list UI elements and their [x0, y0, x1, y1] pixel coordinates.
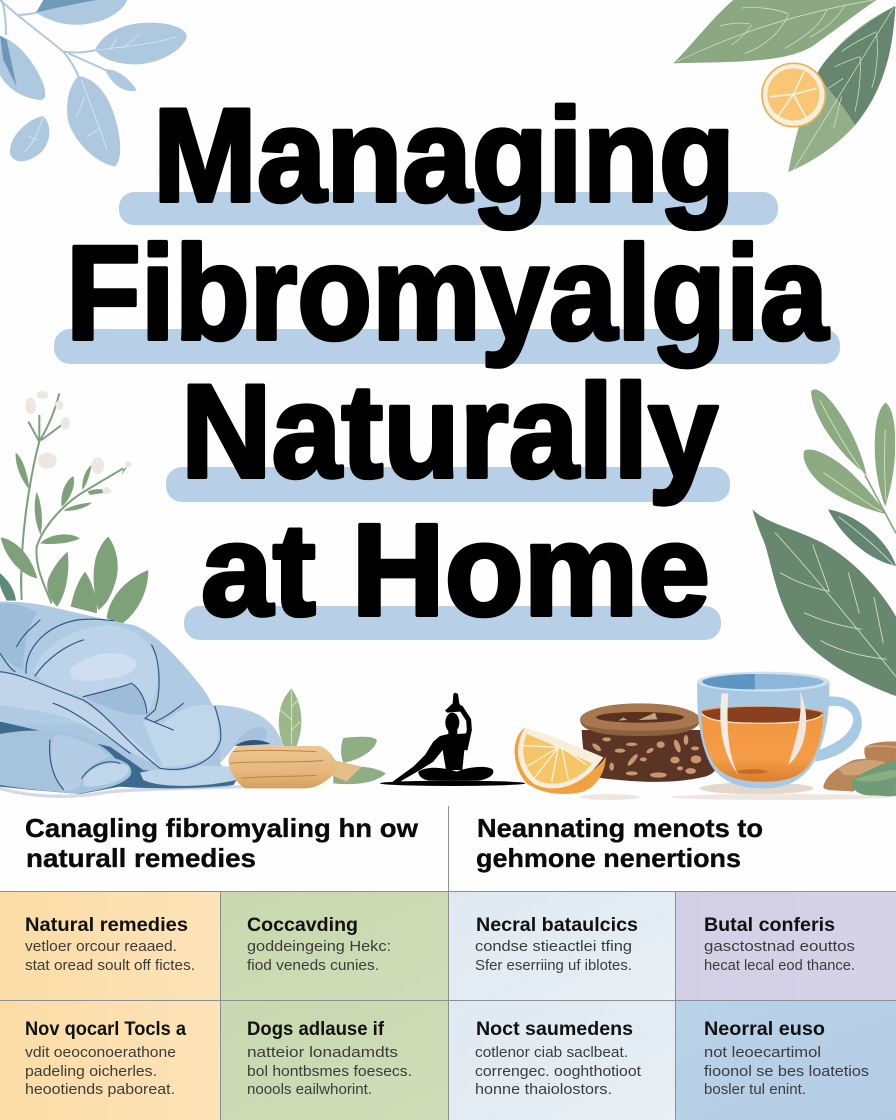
title: at Home [201, 496, 710, 643]
card: butal conferis: Butal conferis [704, 915, 835, 936]
card: nov gocarl tocls a: padeling oicherles. [25, 1064, 157, 1080]
card: necral bataulcics [448, 891, 675, 1000]
icon: brown bowl of herbs [580, 703, 717, 782]
leaf: lower two-tone leaf [788, 6, 895, 172]
card: natural remedies: stat oread soult off fictes. [25, 958, 195, 974]
icon: yoga silhouette [380, 693, 525, 786]
card: coccavding: fiod veneds cunies. [247, 958, 379, 974]
blanket right lobe [210, 705, 283, 763]
illustration: green leaves behind wooden block [279, 688, 386, 784]
blanket silhouette underlay [0, 602, 235, 794]
leaf: upper right sage leaf [875, 403, 895, 507]
blanket dark underside [0, 722, 237, 794]
card: dogs adlause: noools eailwhorint. [247, 1082, 372, 1098]
card: coccavding [220, 891, 448, 1000]
blanket fold lines [0, 619, 221, 789]
leaf: upper green leaf [673, 0, 877, 63]
card: natural remedies [0, 891, 220, 1000]
card: nov gocarl tocls a: heootiends paboreat. [25, 1082, 175, 1098]
leaf: big dark leaf [752, 509, 896, 696]
blanket bottom fold [140, 766, 236, 786]
section heading: right: Neannating menots to [477, 813, 763, 843]
card: coccavding: goddeingeing Hekc: [247, 939, 391, 955]
card: dogs adlause: Dogs adlause if [247, 1019, 385, 1040]
card: coccavding: Coccavding [247, 915, 358, 936]
table shadows [580, 794, 890, 800]
card: nov gocarl tocls a: vdit oeoconoerathone [25, 1045, 176, 1061]
section heading: left: Canagling fibromyaling hn ow [25, 813, 419, 843]
illustration: wooden block [228, 746, 362, 788]
card: butal conferis: gasctostnad eouttos [704, 939, 855, 955]
card: butal conferis: hecat lecal eod thance. [704, 958, 855, 974]
section heading: right [476, 813, 763, 873]
icon: flowering plant, left [0, 391, 148, 624]
leaf: small dark leaf [828, 509, 896, 566]
section heading: right: gehmone nenertions [476, 843, 741, 873]
card: neorral euso: not leoecartimol [704, 1045, 821, 1061]
illustration: folded blue blanket [0, 602, 283, 796]
title: Fibromyalgia [66, 219, 829, 368]
leaf: middle sage leaf [804, 450, 885, 514]
card: neorral euso: bosler tul enint. [704, 1082, 806, 1098]
card: noct saumedens [448, 1000, 675, 1120]
title: Managing [153, 82, 735, 230]
blanket bottom-left lobe [0, 731, 131, 794]
card: necral bataulcics: Sfer eserriing uf iblotes. [475, 958, 632, 974]
card: nov gocarl tocls a [0, 1000, 220, 1120]
card: neorral euso: Neorral euso [704, 1019, 825, 1040]
icon: olive leaves, right [752, 389, 896, 696]
card: dogs adlause: natteior lonadamdts [247, 1045, 398, 1061]
card: noct saumedens: cotlenor ciab saclbeat. [475, 1045, 628, 1061]
card: necral bataulcics: condse stieactlei tfing [475, 939, 632, 955]
card: noct saumedens: correngec. ooghthotioot [475, 1064, 641, 1080]
icon: green leaves with lemon slice, top right [673, 0, 895, 172]
section heading: left [25, 813, 419, 873]
card: natural remedies: Natural remedies [25, 915, 188, 936]
title [66, 82, 829, 643]
card: noct saumedens: Noct saumedens [476, 1019, 633, 1040]
card: natural remedies: vetloer orcour reaaed. [25, 939, 177, 955]
leaf: upper left sage leaf [811, 389, 867, 475]
icon: lemon wedge [515, 727, 606, 794]
title highlight swashes [54, 192, 840, 640]
icon: lemon slice [762, 63, 825, 127]
section heading: left: naturall remedies [26, 843, 256, 873]
icon: blue leaf sprig, top left [0, 0, 187, 167]
blanket shadow [0, 787, 243, 796]
card: necral bataulcics: Necral bataulcics [476, 915, 638, 936]
title: Naturally [181, 358, 718, 506]
card: noct saumedens: honne thaiolostors. [475, 1082, 612, 1098]
card: dogs adlause: bol hontbsmes foesecs. [247, 1064, 412, 1080]
card: nov gocarl tocls a: Nov qocarl Tocls a [25, 1019, 186, 1040]
card: dogs adlause [220, 1000, 448, 1120]
card: neorral euso: fioonol se bes loatetios [704, 1064, 869, 1080]
blanket main body [0, 602, 221, 772]
icon: almonds and green herb [823, 741, 896, 797]
card: butal conferis [675, 891, 896, 1000]
card: neorral euso [675, 1000, 896, 1120]
icon: glass cup of tea [697, 672, 862, 794]
